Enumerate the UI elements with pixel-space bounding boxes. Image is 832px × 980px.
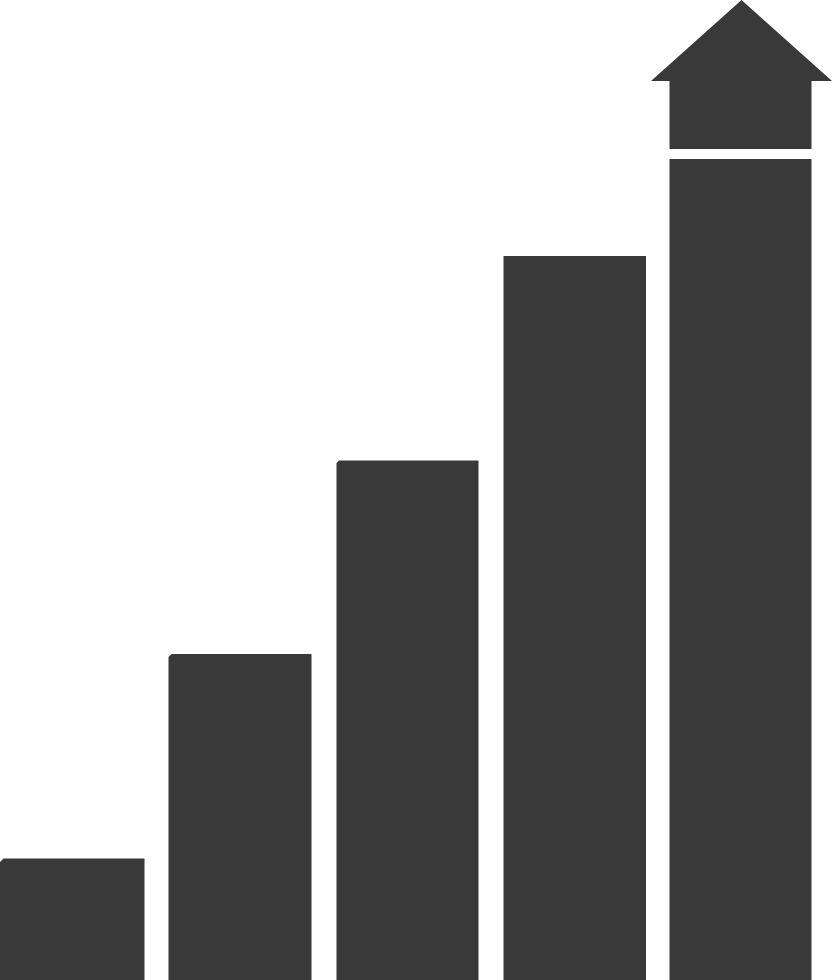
bar 3 bbox=[336, 460, 478, 980]
arrow head bbox=[651, 0, 832, 149]
bar 2 bbox=[168, 654, 312, 980]
bar 4 bbox=[504, 256, 646, 980]
bar 5 bbox=[670, 159, 812, 980]
bar 1 bbox=[0, 858, 144, 980]
